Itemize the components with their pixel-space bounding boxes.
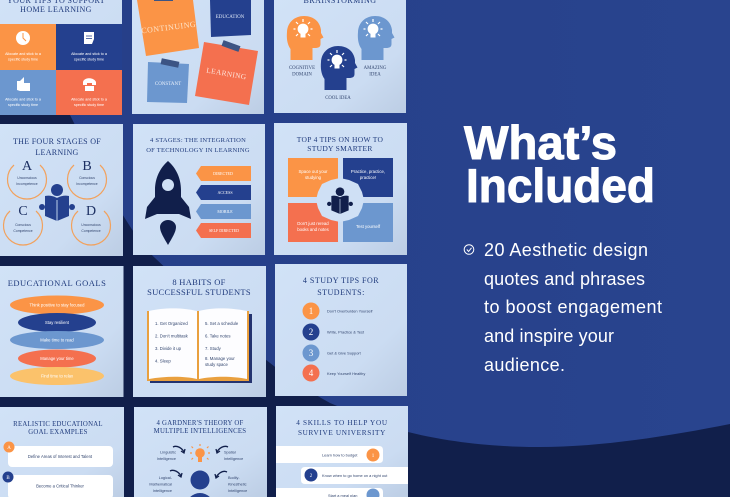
- numbered tips: 4: [309, 368, 314, 378]
- tip blocks: studying: [305, 175, 322, 180]
- example cards: [2, 442, 113, 497]
- panel: realistic goal examples: [0, 407, 124, 497]
- panel: educational goals: [0, 266, 124, 397]
- stage captions: Competence: [81, 229, 101, 233]
- stage arrows: MOBILE: [217, 209, 233, 214]
- example cards: A: [7, 446, 11, 451]
- goal ellipses: [10, 296, 104, 385]
- heading: gardner: MULTIPLE INTELLIGENCES: [154, 428, 246, 435]
- figure: [186, 470, 214, 497]
- intelligence labels: Spatial: [224, 450, 236, 454]
- intelligence labels: Intelligence: [224, 457, 243, 461]
- tip grid: specific study time: [8, 58, 38, 62]
- title: what's included: [464, 116, 655, 212]
- tip grid: specific study time: [74, 58, 104, 62]
- book: 7. Study: [205, 346, 222, 351]
- intelligence labels: Mathematical: [149, 482, 172, 486]
- intelligence labels: Intelligence: [228, 489, 247, 493]
- heading: study tips: 4 STUDY TIPS FOR: [303, 276, 379, 285]
- note: continuing: CONTINUING: [141, 20, 197, 35]
- panel: four stages of learning: [0, 124, 123, 256]
- numbered tips: 3: [309, 348, 314, 358]
- heading: habits: 8 HABITS OF: [172, 277, 226, 287]
- icon: blue head: [358, 16, 394, 60]
- numbered tips: Write, Practice & Test: [327, 330, 365, 334]
- book: [147, 308, 252, 383]
- heading: study smarter: STUDY SMARTER: [307, 144, 373, 153]
- stage captions: [13, 176, 101, 233]
- numbered tips: Don't Overburden Yourself: [327, 308, 373, 314]
- example cards: Define Areas of Interest and Talent: [28, 454, 93, 459]
- icon: orange head: [287, 16, 324, 60]
- stage arrows: [196, 166, 251, 238]
- stage captions: Incompetence: [76, 182, 98, 186]
- numbered tips: 1: [309, 306, 313, 316]
- heading: goal examples: REALISTIC EDUCATIONAL: [13, 421, 103, 428]
- panel: technology integration: [133, 124, 265, 255]
- intelligence labels: Intelligence: [153, 489, 172, 493]
- tip grid: Allocate and stick to a: [5, 52, 42, 56]
- tip grid: Allocate and stick to a: [71, 52, 108, 56]
- book: 1. Get Organized: [155, 321, 188, 326]
- book: 2. Don't multitask: [155, 334, 189, 338]
- tip blocks: Don't just reread: [297, 221, 329, 226]
- tip grid: [0, 24, 122, 115]
- skill rows: Know when to go home on a night out: [322, 473, 388, 478]
- heading: four stages: LEARNING: [35, 148, 79, 157]
- tip blocks: [288, 158, 393, 242]
- title: what's included: Included: [466, 159, 655, 212]
- stage letters: C: [18, 204, 28, 219]
- book: 4. Sleep: [155, 358, 171, 364]
- intelligence labels: Logical-: [159, 476, 173, 480]
- skill rows: Learn how to budget: [322, 452, 358, 458]
- skill rows: [276, 446, 408, 497]
- centre badge: [316, 178, 364, 222]
- description text: to boost engagement: [484, 297, 662, 317]
- stage letters: B: [82, 159, 92, 174]
- note: education: EDUCATION: [216, 15, 245, 20]
- goal ellipses: Find time to relax: [41, 374, 74, 378]
- tip blocks: practice!: [360, 175, 376, 180]
- tip grid: specific study time: [74, 103, 104, 107]
- icon: reader: [327, 187, 353, 214]
- tip blocks: Test yourself: [356, 224, 381, 229]
- heading: survive: 4 SKILLS TO HELP YOU: [296, 419, 388, 427]
- heading: survive: SURVIVE UNIVERSITY: [298, 429, 386, 437]
- intelligence labels: Linguistic: [160, 450, 176, 454]
- stage captions: Conscious: [79, 176, 95, 180]
- tip grid: Allocate and stick to a: [71, 98, 108, 102]
- stage captions: Conscious: [15, 223, 31, 227]
- tip blocks: books and notes: [297, 227, 329, 232]
- stage letters: A: [22, 159, 33, 174]
- example cards: B: [6, 476, 10, 481]
- panel: gardner's theory: [134, 407, 267, 497]
- note: learning: LEARNING: [206, 66, 248, 82]
- description text: and inspire your: [484, 326, 614, 346]
- title: what's included: What’s: [464, 116, 617, 169]
- numbered tips: Get & Give Support: [327, 350, 362, 356]
- intelligence labels: Bodily-: [228, 476, 240, 480]
- stage captions: Unconscious: [81, 223, 101, 227]
- goal ellipses: Make time to read: [40, 338, 74, 342]
- heading: goal examples: GOAL EXAMPLES: [28, 429, 88, 436]
- book: 5. Set a schedule: [205, 321, 239, 326]
- stage captions: Competence: [13, 229, 33, 233]
- numbered tips: 2: [309, 327, 313, 337]
- heading: study tips: STUDENTS:: [317, 288, 365, 297]
- intelligence labels: Kinesthetic: [228, 482, 247, 486]
- heading: integration: OF TECHNOLOGY IN LEARNING: [146, 147, 250, 154]
- head labels: COOL IDEA: [325, 96, 351, 101]
- head labels: COGNITIVE: [289, 66, 315, 71]
- heading: study smarter: TOP 4 TIPS ON HOW TO: [297, 135, 384, 144]
- tip grid: specific study time: [8, 103, 38, 107]
- book: 8. Manage your: [205, 356, 235, 361]
- stage arcs: [4, 165, 111, 245]
- arrows: [170, 446, 228, 478]
- heading: integration: 4 STAGES: THE INTEGRATION: [150, 137, 246, 144]
- numbered tips: Keep Yourself Healthy: [327, 371, 365, 376]
- heading: goals: EDUCATIONAL GOALS: [8, 278, 106, 288]
- book: study space: [205, 362, 229, 367]
- example cards: Become a Critical Thinker: [36, 484, 85, 488]
- skill rows: 2: [310, 474, 313, 479]
- icon: reader: [39, 184, 75, 221]
- panel: brainstorming: [274, 0, 406, 113]
- numbered tips: [302, 302, 373, 382]
- head labels: IDEA: [369, 72, 381, 78]
- heading: four tips: HOME LEARNING: [20, 5, 92, 14]
- description text: 20 Aesthetic design: [484, 240, 648, 260]
- panel: eight habits: [133, 266, 266, 397]
- icon: check circle: [464, 245, 474, 254]
- description text: quotes and phrases: [484, 269, 645, 289]
- stage arrows: SELF DIRECTED: [209, 228, 239, 233]
- icon: navy head: [321, 46, 358, 90]
- intelligence labels: Intelligence: [157, 457, 176, 461]
- panel: sticky notes: [132, 0, 264, 114]
- stage letters: D: [86, 204, 96, 219]
- book: 3. Divide it up: [155, 346, 182, 351]
- goal ellipses: Stay resilient: [45, 320, 70, 325]
- skill rows: 1: [372, 454, 375, 459]
- panel: four tips to support home learning: [0, 0, 122, 115]
- intelligence labels: [149, 450, 247, 493]
- panel: four study tips: [275, 264, 407, 396]
- description text: audience.: [484, 355, 565, 375]
- icon: orange bulb: [190, 444, 210, 462]
- stage captions: Unconscious: [17, 176, 37, 180]
- heading: habits: SUCCESSFUL STUDENTS: [147, 287, 251, 297]
- panel: study smarter: [274, 123, 407, 255]
- tip blocks: Practice, practice,: [351, 169, 385, 174]
- book: 6. Take notes: [205, 334, 230, 338]
- stage letters: [18, 159, 96, 219]
- description text: [484, 240, 662, 375]
- panel: survive university: [276, 406, 408, 497]
- goal ellipses: Manage your time: [40, 356, 74, 361]
- heading: gardner: 4 GARDNER'S THEORY OF: [156, 420, 244, 427]
- stage arrows: DIRECTED: [213, 171, 233, 176]
- tip grid: Allocate and stick to a: [5, 98, 42, 102]
- heading: four stages: THE FOUR STAGES OF: [13, 137, 101, 146]
- stage captions: Incompetence: [16, 182, 38, 186]
- stage arrows: ACCESS: [217, 190, 233, 195]
- head labels: DOMAIN: [292, 72, 312, 78]
- icon: rocket: [145, 161, 191, 245]
- head labels: AMAZING: [364, 66, 387, 71]
- tip blocks: Space out your: [299, 169, 328, 174]
- head labels: [289, 66, 387, 101]
- note: constant: CONSTANT: [155, 82, 181, 87]
- goal ellipses: Think positive to stay focused: [30, 302, 85, 308]
